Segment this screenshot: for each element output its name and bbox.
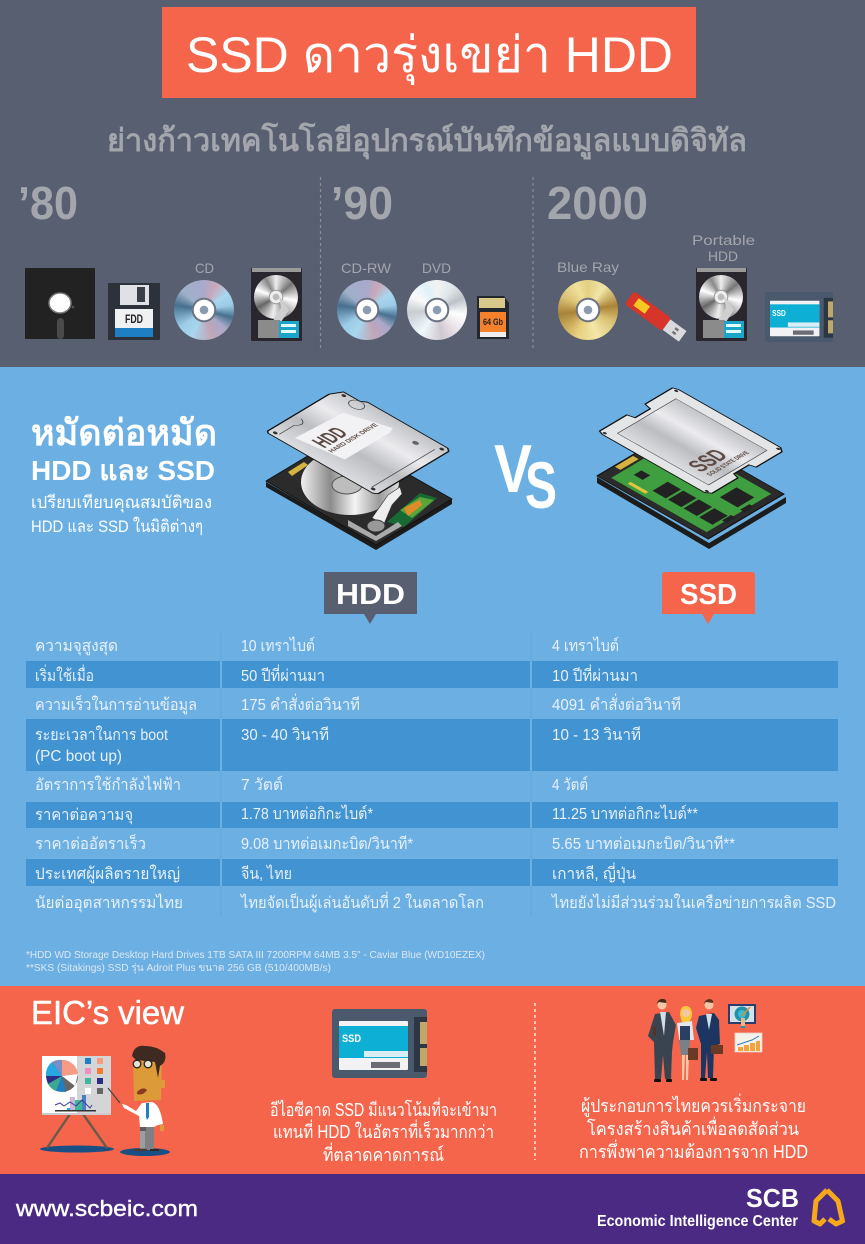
website: www.scbeic.com [15, 1196, 198, 1221]
row: price per capacity: ราคาต่อความจุ [35, 807, 133, 825]
row: price per speed: ราคาต่ออัตราเร็ว [35, 833, 146, 853]
heading block: HDD และ SSD ในมิติต่างๆ [31, 516, 203, 536]
row: capacity: ความจุสูงสุด [35, 638, 118, 656]
panel: comparison [0, 367, 865, 986]
row: main producers: ประเทศผู้ผลิตรายใหญ่ [35, 864, 180, 884]
icon: SSD small [765, 292, 833, 342]
heading block [31, 412, 217, 536]
row: price per speed: 9.08 บาทต่อเมกะบิต/วินาที* [241, 835, 413, 853]
footnotes: *HDD WD Storage Desktop Hard Drives 1TB SATA III 7200RPM 64MB 3.5" - Caviar Blue (WD10EZEX) [26, 950, 485, 961]
row: implications: นัยต่ออุตสาหกรรมไทย [35, 893, 183, 913]
row: price per capacity: 11.25 บาทต่อกิกะไบต์** [552, 804, 698, 823]
icon: SSD small: SSD [772, 309, 786, 318]
icon: Blu-ray disc [558, 280, 618, 340]
footnotes [26, 950, 485, 974]
title banner: SSD ดาวรุ่งเขย่า HDD [186, 27, 673, 85]
icon: FDD floppy: FDD [125, 312, 143, 326]
icon: USB drive [625, 291, 687, 343]
label: Portable HDD [692, 232, 755, 264]
text: recommendation: ผู้ประกอบการไทยควรเริ่มกระจาย [581, 1093, 806, 1117]
icon: SSD large [332, 1009, 427, 1078]
row: price per speed [35, 833, 735, 853]
icon: target display [728, 1004, 756, 1028]
label: VS: V [494, 431, 532, 507]
decade: 2000: 2000 [547, 177, 648, 229]
panel: timeline header [0, 0, 865, 367]
row: read speed: 175 คำสั่งต่อวินาที [241, 693, 360, 714]
icon: SD card [477, 296, 509, 339]
text: forecast: ที่ตลาดคาดการณ์ [323, 1142, 444, 1165]
text: forecast [270, 1097, 497, 1165]
heading block: HDD และ SSD [31, 455, 215, 486]
row: power: 7 วัตต์ [241, 775, 283, 794]
row: capacity [35, 636, 619, 656]
SCB logotype: SCB [746, 1183, 799, 1213]
row: read speed: 4091 คำสั่งต่อวินาที [552, 693, 681, 714]
icon: SSD large: SSD [342, 1033, 361, 1045]
label: CD: CD [195, 260, 214, 276]
row: first use [35, 664, 638, 685]
row: capacity: 4 เทราไบต์ [552, 636, 619, 655]
text: recommendation [579, 1093, 808, 1162]
row: boot time: 10 - 13 วินาที [552, 726, 641, 744]
row: boot time [35, 725, 641, 765]
panel: footer [0, 1174, 865, 1244]
tag: HDD [324, 572, 417, 624]
text: forecast: แทนที่ HDD ในอัตราที่เร็วมากกว่า [273, 1119, 494, 1142]
illustration: SSD exploded: SSD [683, 446, 734, 476]
illustration: SSD exploded [597, 387, 786, 549]
illustration: business people [648, 999, 723, 1082]
row: boot time: (PC boot up) [35, 748, 122, 765]
label: DVD: DVD [422, 260, 451, 276]
row: power [35, 775, 588, 794]
icon: SCB bell logo [814, 1190, 842, 1224]
label: Portable HDD: HDD [708, 248, 738, 264]
row: main producers [35, 862, 636, 884]
icon: DVD disc [407, 280, 467, 340]
heading: EIC's view: EIC’s view [31, 994, 184, 1031]
subtitle: ย่างก้าวเทคโนโลยีอุปกรณ์บันทึกข้อมูลแบบดิจิทัล [107, 122, 747, 160]
SCB logotype: Economic Intelligence Center [597, 1213, 798, 1230]
row: price per speed: 5.65 บาทต่อเมกะบิต/วินาที** [552, 835, 735, 853]
label: CD-RW: CD-RW [341, 260, 392, 276]
panel: EIC's view [0, 986, 865, 1174]
row: implications: ไทยจัดเป็นผู้เล่นอันดับที่ 2 ในตลาดโลก [239, 891, 484, 913]
row: read speed [35, 693, 681, 715]
decade: 90s: ’90 [331, 177, 393, 229]
row: boot time: 30 - 40 วินาที [241, 726, 329, 744]
illustration: presenter with board [40, 1046, 170, 1156]
icon: 8-inch floppy [25, 268, 95, 339]
heading block: หมัดต่อหมัด [31, 412, 217, 453]
row: price per capacity: 1.78 บาทต่อกิกะไบต์* [241, 804, 373, 823]
row: implications: ไทยยังไม่มีส่วนร่วมในเครือข่ายการผลิต SSD [550, 893, 836, 912]
tag: HDD: HDD [336, 579, 405, 611]
text: recommendation: โครงสร้างสินค้าเพื่อลดสัดส่วน [587, 1116, 799, 1139]
row: boot time: ระยะเวลาในการ boot [35, 725, 168, 744]
icon: growth chart [735, 1033, 762, 1052]
row: first use: เริ่มใช้เมื่อ [35, 664, 94, 685]
icon: FDD floppy [108, 283, 160, 340]
row: implications [35, 891, 836, 913]
label: Portable HDD: Portable [692, 232, 755, 248]
row: main producers: เกาหลี, ญี่ปุ่น [552, 862, 636, 884]
row: capacity: 10 เทราไบต์ [241, 636, 315, 655]
row: power: 4 วัตต์ [552, 775, 588, 794]
icon: CD-RW disc [337, 280, 397, 340]
comparison table [26, 632, 838, 916]
row: first use: 50 ปีที่ผ่านมา [241, 664, 325, 685]
footnotes: **SKS (Sitakings) SSD รุ่น Adroit Plus ขนาด 256 GB (510/400MB/s) [26, 963, 331, 974]
illustration: HDD exploded: HDD [307, 424, 354, 452]
row: price per capacity [35, 804, 698, 825]
icon: hard disk 80s [251, 268, 302, 341]
label: Blue Ray: Blue Ray [557, 259, 619, 275]
label: VS: S [525, 448, 557, 522]
row: first use: 10 ปีที่ผ่านมา [552, 664, 638, 685]
icon: portable hard disk [696, 268, 747, 341]
decade: 80s: ’80 [18, 177, 78, 229]
row: read speed: ความเร็วในการอ่านข้อมูล [35, 694, 197, 715]
tag: SSD [662, 572, 755, 624]
row: main producers: จีน, ไทย [241, 864, 292, 883]
label: VS [494, 431, 557, 522]
heading block: เปรียบเทียบคุณสมบัติของ [31, 493, 212, 513]
illustration: HDD exploded [266, 387, 452, 550]
text: recommendation: การพึ่งพาความต้องการจาก HDD [579, 1139, 808, 1162]
title banner [162, 7, 696, 98]
SCB logotype [597, 1183, 799, 1230]
illustration: HDD exploded: HARD DISK DRIVE [328, 423, 380, 454]
text: forecast: อีไอซีคาด SSD มีแนวโน้มที่จะเข้ามา [270, 1097, 497, 1120]
icon: CD disc [174, 280, 234, 340]
illustration: SSD exploded: SOLID STATE DRIVE [706, 451, 752, 477]
row: power: อัตราการใช้กำลังไฟฟ้า [35, 775, 181, 794]
icon: SD card: 64 Gb [483, 317, 503, 327]
tag: SSD: SSD [680, 579, 737, 611]
